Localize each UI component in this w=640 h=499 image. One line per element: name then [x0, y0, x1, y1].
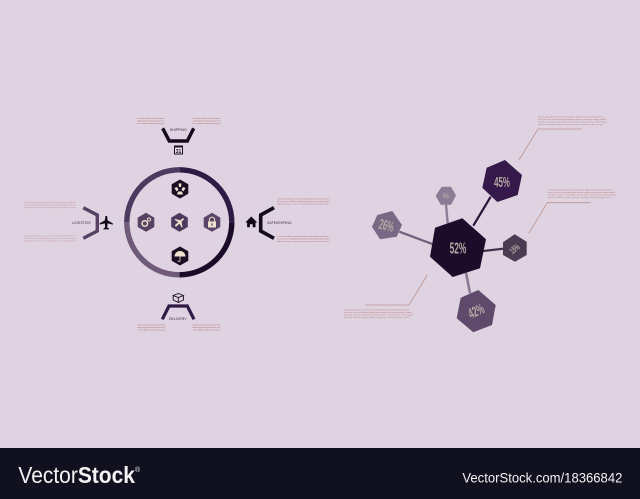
icon: plane hexagon: [171, 213, 188, 232]
panel: safekeeping: [245, 198, 330, 243]
panel: ring diagram: [127, 170, 232, 275]
callout: middle right: faucibus mauris sed porttitor ipsum dolor tincidunt vitae mattis ligula: [548, 194, 616, 197]
footer id: VectorStock.com/18366842: [462, 470, 622, 486]
text block: delivery right: Lorem ipsum dolor sit amet consectetur: [192, 324, 221, 327]
callout: top right: faucibus mauris sed porttitor ipsum dolor tincidunt vitae mattis ligula: [538, 121, 608, 124]
text block: shipping right: adipiscing elit morbi dictum lacus vel: [192, 120, 221, 122]
hexagon: 52%: [430, 218, 486, 277]
callout: lower left: faucibus mauris sed porttitor ipsum dolor tincidunt vitae mattis ligula: [344, 314, 414, 317]
text block: logistics lower: Lorem ipsum dolor sit amet consectetur adipiscing elit morbi dictum: [24, 234, 76, 238]
registered mark: ®: [135, 466, 141, 474]
text block: safekeeping upper: [277, 198, 330, 206]
text block: safekeeping lower: Lorem ipsum dolor sit amet consectetur adipiscing elit morbi dictum: [277, 235, 329, 238]
text block: safekeeping lower: lacus vel nunc vestibulum pellentesque augue sed tempor magna: [277, 238, 330, 240]
bracket: safekeeping: [261, 208, 274, 238]
icon: radiation hexagon: [172, 180, 188, 198]
heading: shipping: SHIPPING: [170, 127, 187, 132]
text block: logistics upper: Lorem ipsum dolor sit amet consectetur adipiscing elit morbi dictum: [24, 201, 76, 204]
text block: safekeeping upper: Lorem ipsum dolor sit amet consectetur adipiscing elit morbi dictum: [277, 198, 329, 201]
callout: top right: lacus vel nunc vestibulum pellentesque augue sed tempor magna aliquet: [538, 118, 606, 121]
icon: umbrella hexagon: [172, 246, 188, 266]
panel: hexagon network chart: [344, 116, 616, 332]
panel: shipping: [137, 117, 221, 155]
hexagon: 42%: [457, 290, 496, 332]
callout: top right: Lorem ipsum dolor sit amet consectetur adipiscing elit morbi dictum ac: [538, 116, 605, 119]
hexagon: 5%: [436, 187, 456, 205]
panel: delivery: [137, 294, 221, 332]
hexagon: 5%: 5%: [443, 193, 450, 201]
text block: safekeeping upper: aliquet faucibus mauris sed porttitor ipsum dolor tincidunt: [277, 203, 330, 206]
callout: lower left: Lorem ipsum dolor sit amet consectetur adipiscing elit morbi dictum ac: [344, 309, 411, 312]
logo: VectorStock: VectorStock: [18, 462, 136, 488]
text block: delivery left: Lorem ipsum dolor sit amet consectetur: [137, 324, 166, 327]
text block: delivery left: [137, 324, 166, 332]
ring: [127, 170, 232, 275]
text block: logistics upper: [24, 201, 77, 209]
icon: box: [173, 294, 183, 302]
callout: middle right: rhoncus blandit sapien ultrices pretium commodo quis lorem: [548, 196, 612, 199]
text block: logistics upper: lacus vel nunc vestibulum pellentesque augue sed tempor magna: [24, 204, 77, 206]
hexagon: 42%: 42%: [466, 301, 487, 323]
text block: delivery right: [192, 324, 221, 332]
callout: middle right: Lorem ipsum dolor sit amet consectetur adipiscing elit morbi dictum ac: [548, 189, 614, 192]
text block: logistics upper: aliquet faucibus mauris sed porttitor ipsum dolor tincidunt: [24, 206, 76, 209]
text block: shipping right: [192, 117, 221, 125]
heading: delivery: DELIVERY: [169, 316, 187, 321]
text block: shipping right: Lorem ipsum dolor sit amet consectetur: [192, 117, 221, 120]
text block: shipping right: nunc vestibulum pellentesque augue: [192, 122, 221, 125]
text block: safekeeping upper: lacus vel nunc vestibulum pellentesque augue sed tempor magna: [277, 200, 330, 203]
text block: delivery left: nunc vestibulum pellentesque augue: [137, 329, 166, 332]
callout: lower left: rhoncus blandit sapien ultrices pretium commodo quis lorem: [344, 316, 409, 319]
hexagon: 45%: [482, 160, 522, 202]
hexagon: 45%: 45%: [494, 174, 510, 191]
text block: safekeeping lower: [277, 235, 330, 243]
text block: delivery left: adipiscing elit morbi dictum lacus vel: [137, 326, 166, 329]
callout: lower left: [344, 275, 427, 319]
icon: padlock hexagon: [204, 213, 220, 232]
panel: logistics: [24, 201, 113, 242]
heading: safekeeping: SAFEKEEPING: [267, 220, 292, 225]
bracket: delivery: [162, 306, 194, 319]
callout: top right: [519, 116, 608, 160]
hexagon: 26%: [372, 211, 402, 239]
callout: middle right: lacus vel nunc vestibulum pellentesque augue sed tempor magna aliquet: [548, 191, 615, 194]
text block: safekeeping lower: aliquet faucibus mauris sed porttitor ipsum dolor tincidunt: [277, 240, 330, 243]
heading: logistics: LOGISTICS: [72, 220, 91, 225]
bracket: logistics: [83, 208, 97, 238]
connectors: [399, 197, 503, 293]
text block: logistics lower: lacus vel nunc vestibulum pellentesque augue sed tempor magna: [24, 237, 77, 240]
icon: airplane: [100, 216, 113, 229]
icon: house: [245, 216, 257, 227]
callout: middle right: [529, 189, 616, 233]
icon: calendar: 31: [176, 149, 181, 155]
text block: shipping left: [137, 117, 165, 125]
text block: delivery right: nunc vestibulum pellentesque augue: [192, 329, 221, 332]
hexagon: 15%: [503, 234, 527, 262]
hexagon: 15%: 15%: [508, 242, 522, 256]
icon: gears hexagon: [138, 213, 154, 232]
text block: shipping left: nunc vestibulum pellentesque augue: [137, 122, 165, 125]
hexagon: 52%: 52%: [450, 240, 466, 258]
hexagon: 26%: 26%: [377, 217, 395, 236]
text block: shipping left: Lorem ipsum dolor sit amet consectetur: [137, 117, 165, 120]
bracket: shipping: [163, 128, 194, 141]
text block: delivery right: adipiscing elit morbi dictum lacus vel: [192, 326, 221, 329]
footer bar: [0, 448, 640, 499]
text block: shipping left: adipiscing elit morbi dictum lacus vel: [137, 120, 165, 122]
text block: logistics lower: aliquet faucibus mauris sed porttitor ipsum dolor tincidunt: [24, 240, 76, 242]
callout: lower left: lacus vel nunc vestibulum pellentesque augue sed tempor magna aliquet: [344, 311, 412, 314]
text block: logistics lower: [24, 234, 77, 242]
callout: top right: rhoncus blandit sapien ultrices pretium commodo quis lorem: [538, 123, 603, 126]
